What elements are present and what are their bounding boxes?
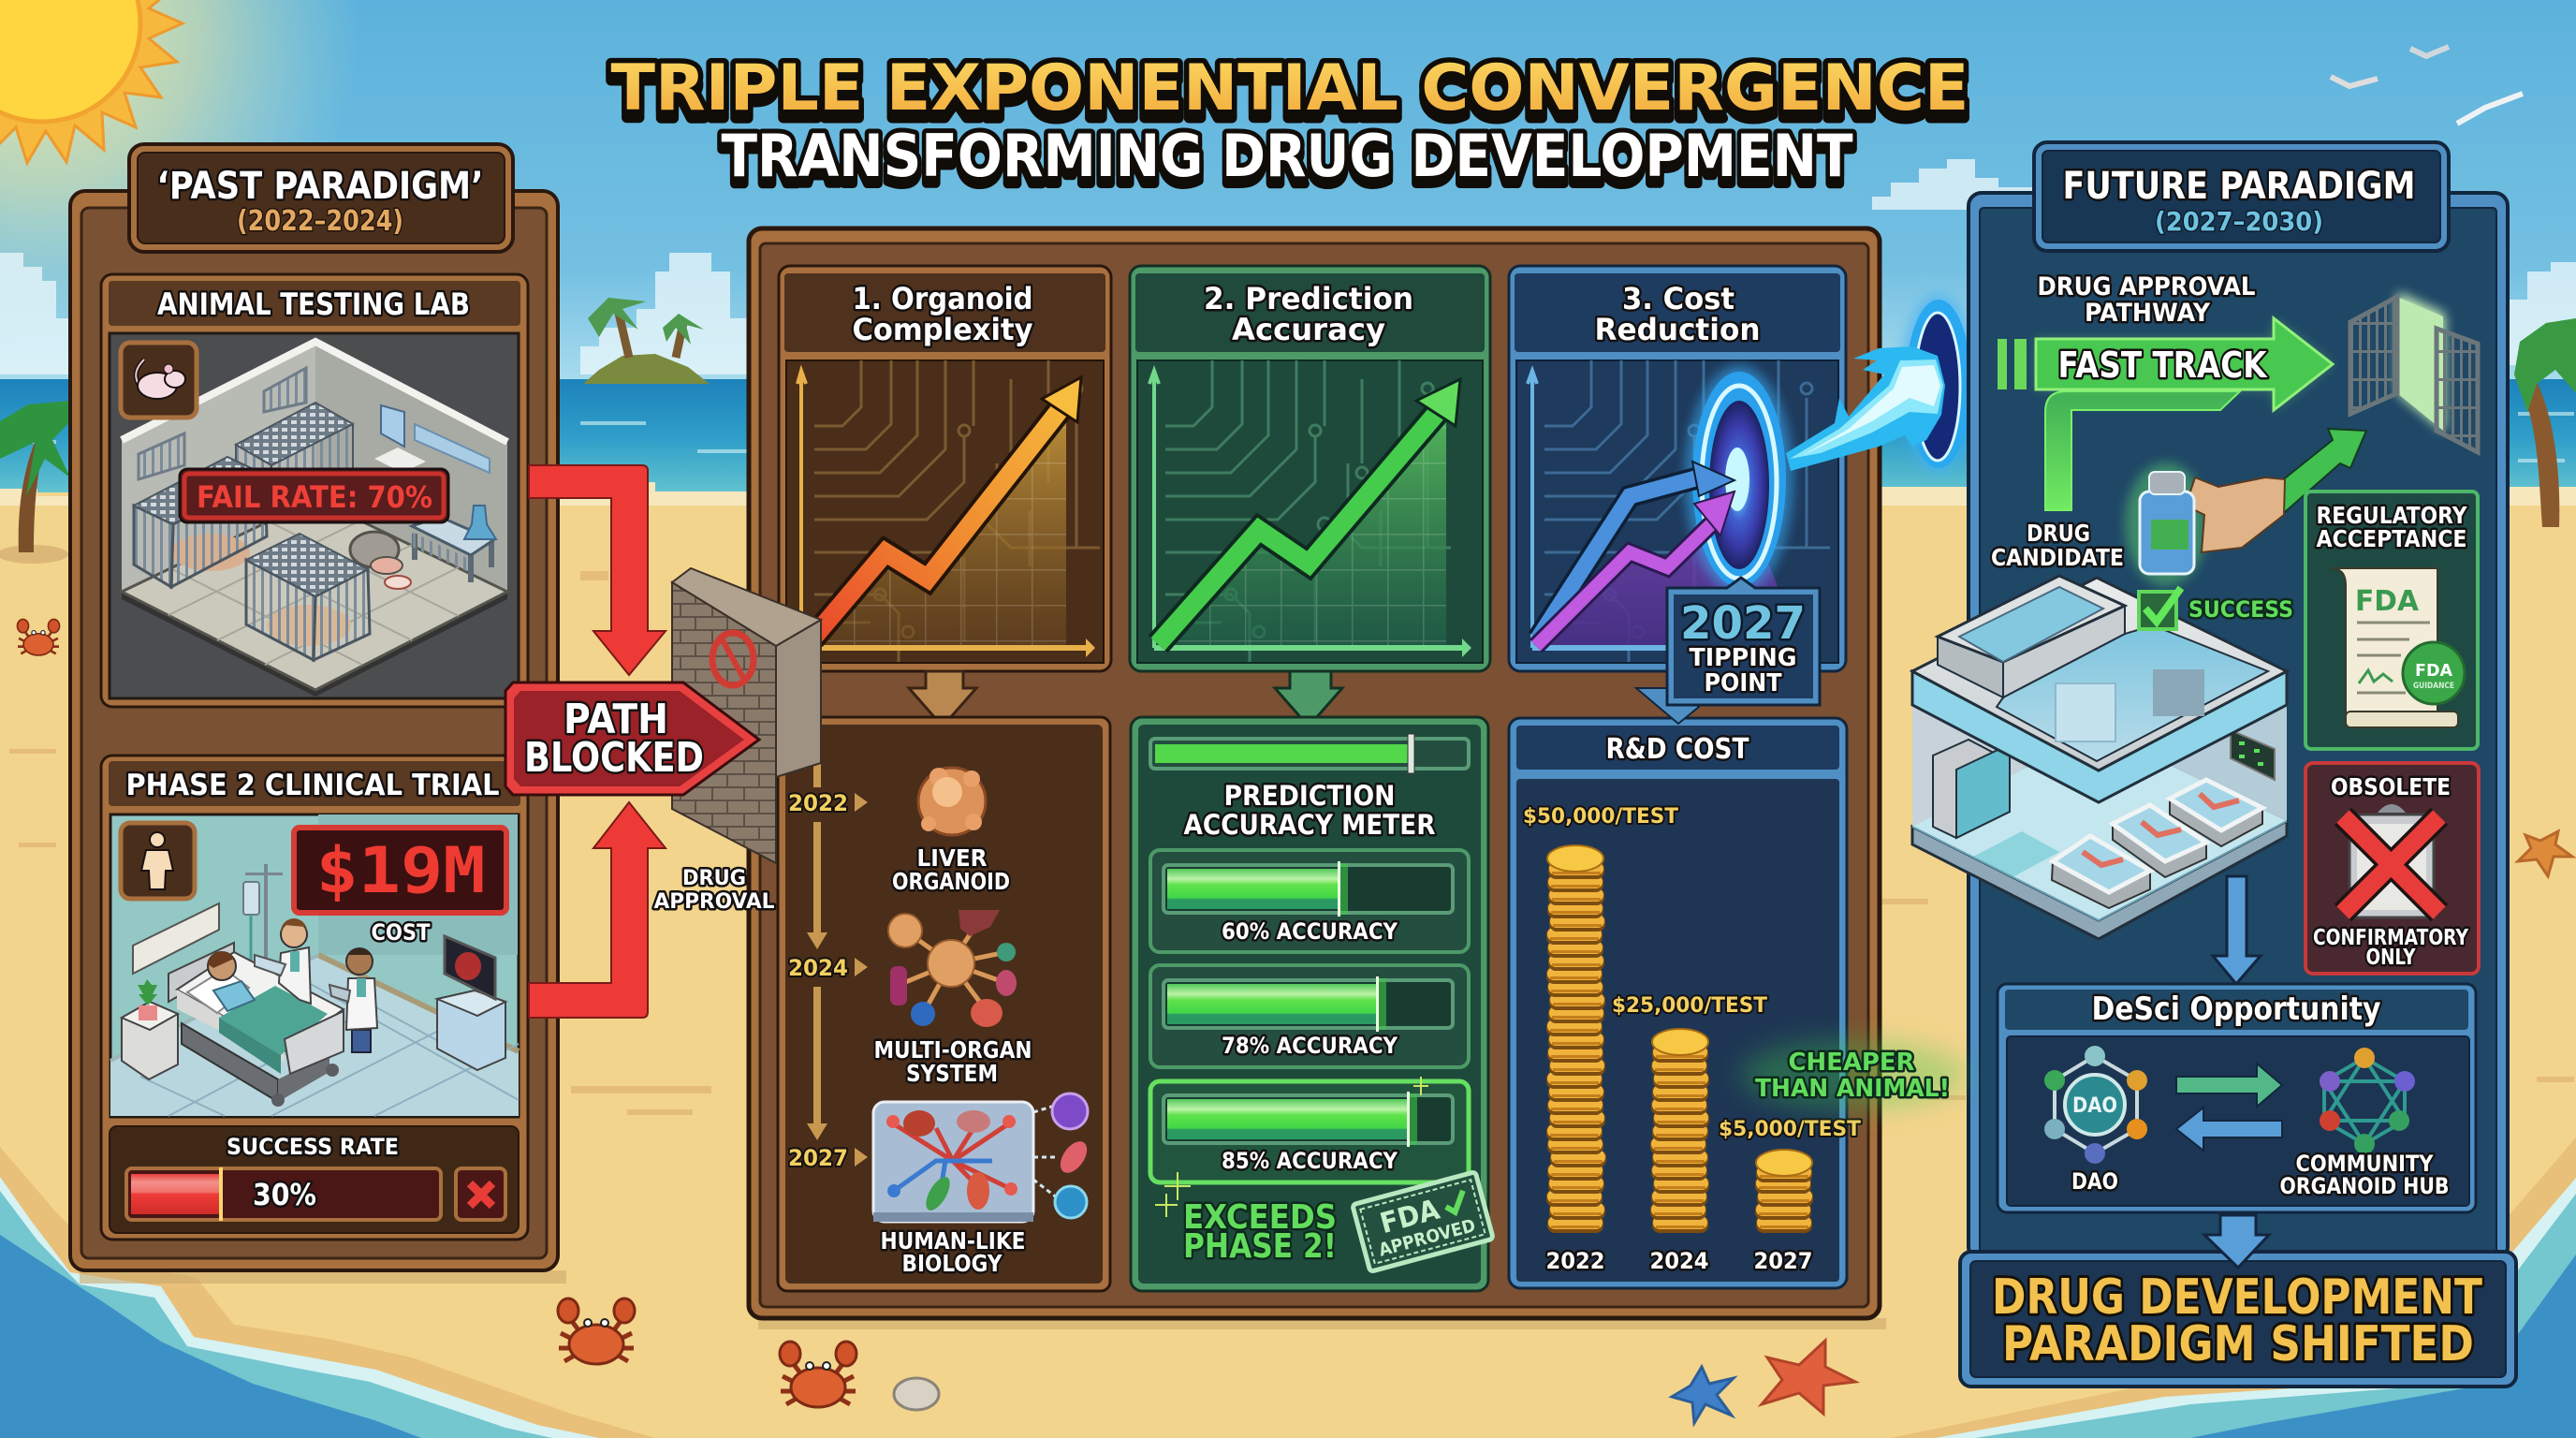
cage back xyxy=(236,403,353,496)
panel: DeSci opportunity: DeSci Opportunity xyxy=(2091,990,2381,1028)
icon: DAO network: DAO xyxy=(2072,1094,2117,1118)
vents xyxy=(139,368,490,479)
IV pole xyxy=(243,864,283,964)
callout: cheaper than animal: CHEAPER xyxy=(1788,1049,1915,1077)
title: TRIPLE EXPONENTIAL CONVERGENCE xyxy=(610,51,1969,125)
panel: cost reduction chart: 3. Cost xyxy=(1622,281,1734,316)
panel: animal testing lab: ANIMAL TESTING LAB xyxy=(157,286,470,322)
background: sea xyxy=(0,379,2576,496)
callout: 2027 tipping point xyxy=(1636,578,1820,724)
illustration: hospital room xyxy=(110,814,519,1117)
background: right water xyxy=(1891,1137,2576,1438)
icon: liver organoid xyxy=(918,768,986,835)
panel: paradigm shifted banner: PARADIGM SHIFTED xyxy=(2002,1316,2474,1372)
left palm tree xyxy=(0,401,70,564)
panel: obsolete confirmatory only: CONFIRMATORY xyxy=(2313,926,2468,950)
icon: FDA guidance scroll: FDA xyxy=(2355,585,2420,618)
arrow: organoid down xyxy=(909,671,976,726)
arrow: red arrow from trial xyxy=(529,802,666,1018)
callout: 2027 tipping point: 2027 xyxy=(1680,597,1806,650)
panel: future paradigm xyxy=(1912,142,2508,1260)
panel: future paradigm: PATHWAY xyxy=(2085,299,2210,328)
arrow: fast track: FAST TRACK xyxy=(2057,345,2268,386)
heading: past paradigm plate: (2022–2024) xyxy=(237,205,403,238)
icon: red x xyxy=(456,1168,505,1220)
panel shadows on the sand xyxy=(80,1270,1886,1329)
callout: 2027 tipping point: TIPPING xyxy=(1689,644,1797,672)
callout: $19M cost display xyxy=(294,828,506,913)
arrow: desci to banner xyxy=(2204,1215,2269,1268)
arrow: fast track xyxy=(1998,318,2333,410)
callout: exceeds phase 2 xyxy=(1183,1198,1337,1266)
icon: DAO network xyxy=(2044,1046,2147,1164)
gauge: overall meter xyxy=(1150,734,1469,773)
callout: success check xyxy=(2139,588,2293,629)
stamp: FDA approved: APPROVED xyxy=(1377,1215,1478,1261)
panel: obsolete confirmatory only: ONLY xyxy=(2366,946,2416,970)
panel: phase 2 clinical trial: PHASE 2 CLINICAL TRIAL xyxy=(125,769,500,802)
panel: phase 2 clinical trial xyxy=(101,756,528,1240)
gauge: 60% accuracy xyxy=(1150,850,1469,952)
panel: organoid timeline: 2027 xyxy=(788,1145,848,1171)
background: left water xyxy=(0,1147,655,1438)
gauge: 85% accuracy xyxy=(1150,1077,1469,1217)
label: drug approval: APPROVAL xyxy=(653,890,775,914)
arrow: to gate xyxy=(2276,429,2366,512)
background: island with palms xyxy=(583,298,710,384)
icon: open gate xyxy=(2350,292,2478,452)
panel: organoid complexity chart xyxy=(779,266,1111,671)
monitor cart xyxy=(437,936,505,1070)
panel: organoid timeline: BIOLOGY xyxy=(902,1250,1003,1277)
portal xyxy=(1685,365,1793,594)
icon: FDA guidance scroll xyxy=(2331,568,2465,727)
panel: paradigm shifted banner xyxy=(1960,1252,2516,1387)
panel: R&D cost: 2027 xyxy=(1754,1248,1812,1274)
cage left xyxy=(134,457,267,587)
icon: red cross xyxy=(2343,816,2439,913)
wall monitor xyxy=(2231,730,2275,780)
icon: human figure xyxy=(121,823,195,899)
panel: organoid timeline: HUMAN-LIKE xyxy=(880,1227,1026,1255)
stamp: FDA approved: FDA xyxy=(1377,1194,1443,1240)
upper floor rim xyxy=(1912,578,2287,770)
callout: fail rate xyxy=(180,469,448,522)
lab bench and flask xyxy=(412,506,496,582)
doctor with tablet xyxy=(329,948,377,1052)
stamp: FDA approved xyxy=(1353,1172,1493,1271)
panel: R&D cost: R&D COST xyxy=(1606,733,1749,766)
panel: prediction accuracy chart: Accuracy xyxy=(1232,312,1385,347)
seagulls xyxy=(2331,47,2523,124)
callout: cheaper than animal: THAN ANIMAL! xyxy=(1755,1075,1950,1103)
panel: prediction accuracy chart: 2. Prediction xyxy=(1204,281,1413,316)
panel: cost reduction chart xyxy=(1509,266,1846,671)
panel: regulatory acceptance xyxy=(2305,492,2478,749)
icon: white mouse xyxy=(121,343,197,418)
panel: DeSci opportunity: COMMUNITY xyxy=(2295,1151,2434,1177)
icon: community organoid hub xyxy=(2320,1048,2415,1154)
upper floor glass band xyxy=(1912,671,2287,802)
icon: FDA guidance scroll: GUIDANCE xyxy=(2413,682,2454,691)
panel: success rate xyxy=(110,1126,519,1233)
panel: organoid timeline: LIVER xyxy=(917,844,987,872)
panel: animal testing lab xyxy=(101,274,528,707)
cage front xyxy=(246,534,370,660)
panel: obsolete confirmatory only xyxy=(2305,763,2479,974)
callout: 2027 tipping point: POINT xyxy=(1704,669,1782,697)
panel: future paradigm: DRUG xyxy=(2027,520,2090,547)
panel: organoid timeline: MULTI-ORGAN xyxy=(874,1036,1032,1064)
callout: path blocked xyxy=(505,682,759,795)
icon: multi-organ system xyxy=(888,910,1017,1027)
energy beam to future portal xyxy=(1786,294,1978,474)
organoid tanks xyxy=(2052,780,2262,908)
panel: DeSci opportunity: ORGANOID HUB xyxy=(2280,1173,2449,1199)
starfish xyxy=(1672,831,2572,1423)
panel: regulatory acceptance: ACCEPTANCE xyxy=(2316,525,2467,552)
background: sky xyxy=(0,0,2576,384)
panel: success rate: SUCCESS RATE xyxy=(227,1134,399,1160)
panel: paradigm shifted banner: DRUG DEVELOPMENT xyxy=(1992,1269,2482,1326)
panel: organoid timeline: 2022 xyxy=(788,790,848,816)
panel: R&D cost: $50,000/TEST xyxy=(1523,805,1678,829)
panel: prediction accuracy meter xyxy=(1131,717,1493,1291)
panel: DeSci opportunity: DAO xyxy=(2071,1168,2118,1195)
chart: 2022 coin stack xyxy=(1546,845,1606,1233)
panel: obsolete confirmatory only: OBSOLETE xyxy=(2331,773,2451,800)
bedside table with plant xyxy=(122,979,178,1079)
panel: organoid complexity chart: Complexity xyxy=(852,312,1033,347)
label: drug approval xyxy=(653,867,775,914)
panel: R&D cost xyxy=(1509,718,1861,1288)
callout: exceeds phase 2: PHASE 2! xyxy=(1183,1227,1337,1266)
panel: future paradigm: CANDIDATE xyxy=(1991,544,2124,571)
gauge: 78% accuracy: 78% ACCURACY xyxy=(1222,1033,1398,1059)
panel: organoid timeline xyxy=(778,717,1110,1291)
panel: DeSci opportunity xyxy=(1998,984,2476,1212)
icon: human-like biology chip xyxy=(873,1093,1092,1222)
crabs and shells xyxy=(17,619,939,1410)
callout: success check: SUCCESS xyxy=(2188,596,2293,623)
arrow: L-shaped fast track feeder xyxy=(2045,391,2240,510)
upper floor opening xyxy=(1997,625,2268,761)
icon: hand holding drug vial xyxy=(2125,462,2285,586)
gauge: 60% accuracy: 60% ACCURACY xyxy=(1222,918,1398,945)
icon: brick wall xyxy=(672,568,821,863)
illustration: isometric animal lab room xyxy=(122,342,507,697)
heading: future paradigm plate: FUTURE PARADIGM xyxy=(2063,165,2415,208)
hospital bed xyxy=(168,943,344,1107)
panel: prediction accuracy chart xyxy=(1130,266,1490,671)
title: TRANSFORMING DRUG DEVELOPMENT xyxy=(721,122,1853,190)
doctor with chart xyxy=(255,918,311,1004)
heading: past paradigm plate xyxy=(129,144,513,252)
panel: success rate: 30% xyxy=(253,1177,316,1212)
callout: path blocked: BLOCKED xyxy=(524,734,704,782)
illustration: isometric organoid lab xyxy=(1912,576,2287,939)
panel: central convergence xyxy=(749,228,1880,1318)
panel: regulatory acceptance: REGULATORY xyxy=(2316,502,2467,529)
panel: R&D cost: 2024 xyxy=(1649,1248,1709,1274)
chart: 2027 coin stack xyxy=(1755,1150,1813,1233)
arrow: lab to desci xyxy=(2213,876,2261,984)
callout: cheaper than animal xyxy=(1741,1039,1966,1110)
callout: fail rate: FAIL RATE: 70% xyxy=(197,479,432,515)
panel: prediction accuracy meter: PREDICTION xyxy=(1224,780,1395,812)
arrow: hub to DAO xyxy=(2176,1108,2282,1151)
icon: FDA guidance scroll: FDA xyxy=(2415,661,2452,681)
clouds xyxy=(0,159,2576,374)
wall panel xyxy=(133,903,219,974)
panel: organoid timeline: SYSTEM xyxy=(906,1060,998,1087)
label: drug approval: DRUG xyxy=(682,867,746,890)
panel: R&D cost: $25,000/TEST xyxy=(1612,994,1767,1018)
callout: $19M cost display: $19M xyxy=(316,834,485,908)
arrow: prediction down xyxy=(1275,671,1342,726)
arrow: red arrow from lab xyxy=(529,465,666,675)
chart: 2024 coin stack xyxy=(1650,1029,1709,1233)
illustration: hospital room: COST xyxy=(371,919,431,946)
callout: exceeds phase 2: EXCEEDS xyxy=(1183,1198,1337,1237)
panel: prediction accuracy meter: ACCURACY METER xyxy=(1183,809,1436,841)
panel: organoid complexity chart: 1. Organoid xyxy=(852,281,1033,316)
panel: organoid timeline: 2024 xyxy=(788,955,848,981)
background: sand beach xyxy=(0,482,2576,1438)
panel: future paradigm: DRUG APPROVAL xyxy=(2037,272,2256,301)
gauge: 85% accuracy: 85% ACCURACY xyxy=(1222,1148,1398,1174)
panel: past paradigm xyxy=(70,144,558,1270)
panel: R&D cost: $5,000/TEST xyxy=(1719,1118,1861,1141)
heading: future paradigm plate: (2027–2030) xyxy=(2155,206,2323,237)
right palm tree xyxy=(2514,318,2576,527)
heading: past paradigm plate: ‘PAST PARADIGM’ xyxy=(157,165,483,208)
title xyxy=(610,51,1969,190)
panel: organoid timeline: ORGANOID xyxy=(892,868,1010,895)
arrow: DAO to hub xyxy=(2176,1064,2282,1107)
background: sun xyxy=(0,0,360,342)
panel: cost reduction chart: Reduction xyxy=(1595,312,1760,347)
rooftop unit xyxy=(1938,576,2125,697)
gauge: 78% accuracy xyxy=(1150,965,1469,1067)
heading: future paradigm plate xyxy=(2034,142,2449,251)
callout: path blocked: PATH xyxy=(564,696,668,743)
cabinet xyxy=(1933,740,2010,838)
panel: R&D cost: 2022 xyxy=(1546,1248,1604,1274)
